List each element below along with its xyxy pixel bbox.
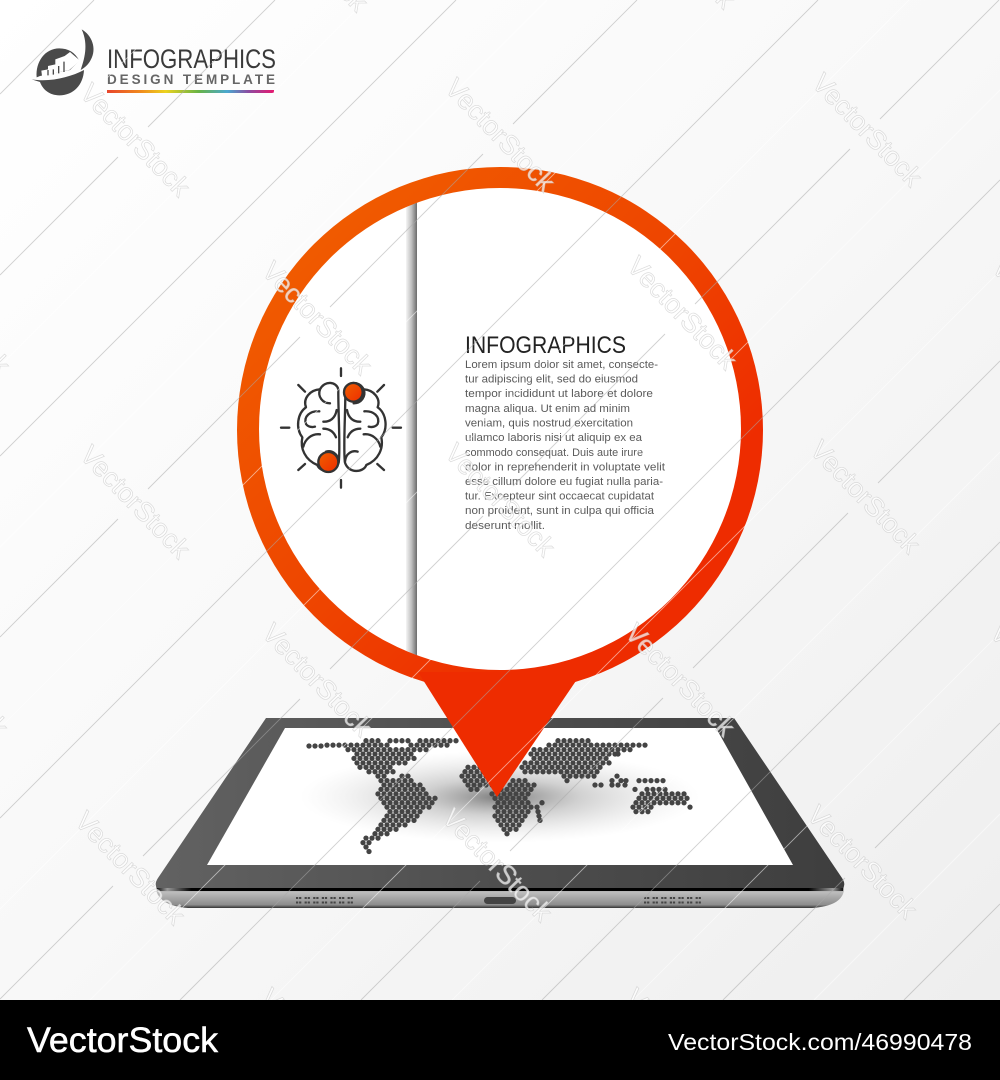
footer brand: VectorStock <box>27 1021 219 1060</box>
watermark: VectorStock <box>621 251 743 376</box>
right hemisphere <box>344 383 386 471</box>
watermark: VectorStock <box>804 435 926 560</box>
watermark: VectorStock <box>439 438 561 563</box>
orange dot top <box>344 383 363 402</box>
North America <box>309 741 426 781</box>
watermark: VectorStock <box>619 618 741 743</box>
fold shadow <box>406 195 417 656</box>
tablet frame <box>156 718 844 888</box>
tablet metal edge <box>156 882 844 908</box>
location pin <box>237 167 763 797</box>
Islands <box>595 750 663 789</box>
icon: brain <box>281 368 401 488</box>
watermark: VectorStock <box>256 618 378 743</box>
body text: magna aliqua. Ut enim ad minim <box>465 403 630 415</box>
watermark: VectorStock <box>74 78 196 203</box>
body text: tur adipiscing elit, sed do eiusmod <box>465 374 638 386</box>
body text: commodo consequat. Duis aute irure <box>465 447 643 459</box>
logo <box>32 29 276 95</box>
body text: esse cillum dolore eu fugiat nulla paria- <box>465 476 663 488</box>
watermark: VectorStock <box>256 256 378 381</box>
watermark: VectorStock <box>806 68 928 193</box>
tablet screen <box>207 728 793 865</box>
body text: tempor incididunt ut labore et dolore <box>465 388 653 400</box>
charging port <box>484 897 516 904</box>
watermark: VectorStock <box>436 803 558 928</box>
Greenland <box>420 741 456 745</box>
body text: Lorem ipsum dolor sit amet, consecte- <box>465 359 658 371</box>
pin pointer <box>418 672 582 797</box>
tablet <box>156 718 844 908</box>
right speaker <box>644 898 704 902</box>
watermark: VectorStock <box>74 440 196 565</box>
footer url: VectorStock.com/46990478 <box>668 1029 972 1055</box>
pin shadow on screen <box>300 751 700 843</box>
footer bar <box>0 1000 1000 1080</box>
body text: deserunt mollit. <box>465 520 545 532</box>
Eurasia <box>522 741 645 781</box>
rays <box>281 368 401 488</box>
South America <box>363 781 435 852</box>
watermark: VectorStock <box>801 800 923 925</box>
body text: veniam, quis nostrud exercitation <box>465 418 633 430</box>
tablet bezel shadow line <box>157 888 843 891</box>
left hemisphere <box>298 383 339 471</box>
orange dot bottom <box>318 452 338 472</box>
body text: tur. Excepteur sint occaecat cupidatat <box>465 490 655 502</box>
left speaker <box>296 898 356 902</box>
logo title: INFOGRAPHICS <box>107 44 276 74</box>
logo mark <box>32 29 94 95</box>
pin inner panel <box>259 188 741 670</box>
watermark: VectorStock <box>439 73 561 198</box>
body text: non proident, sunt in culpa qui officia <box>465 505 655 517</box>
Africa <box>462 767 534 834</box>
body text <box>465 359 666 532</box>
pin ring <box>237 167 763 693</box>
logo subtitle: DESIGN TEMPLATE <box>107 72 275 87</box>
dotted world map <box>309 741 690 852</box>
rainbow bar <box>107 90 274 93</box>
Australia <box>633 789 690 812</box>
watermark: VectorStock <box>69 806 191 931</box>
body text: ullamco laboris nisi ut aliquip ex ea <box>465 432 643 444</box>
Madagascar <box>537 803 542 820</box>
heading: INFOGRAPHICS <box>465 332 626 359</box>
body text: dolor in reprehenderit in voluptate velit <box>465 462 666 474</box>
